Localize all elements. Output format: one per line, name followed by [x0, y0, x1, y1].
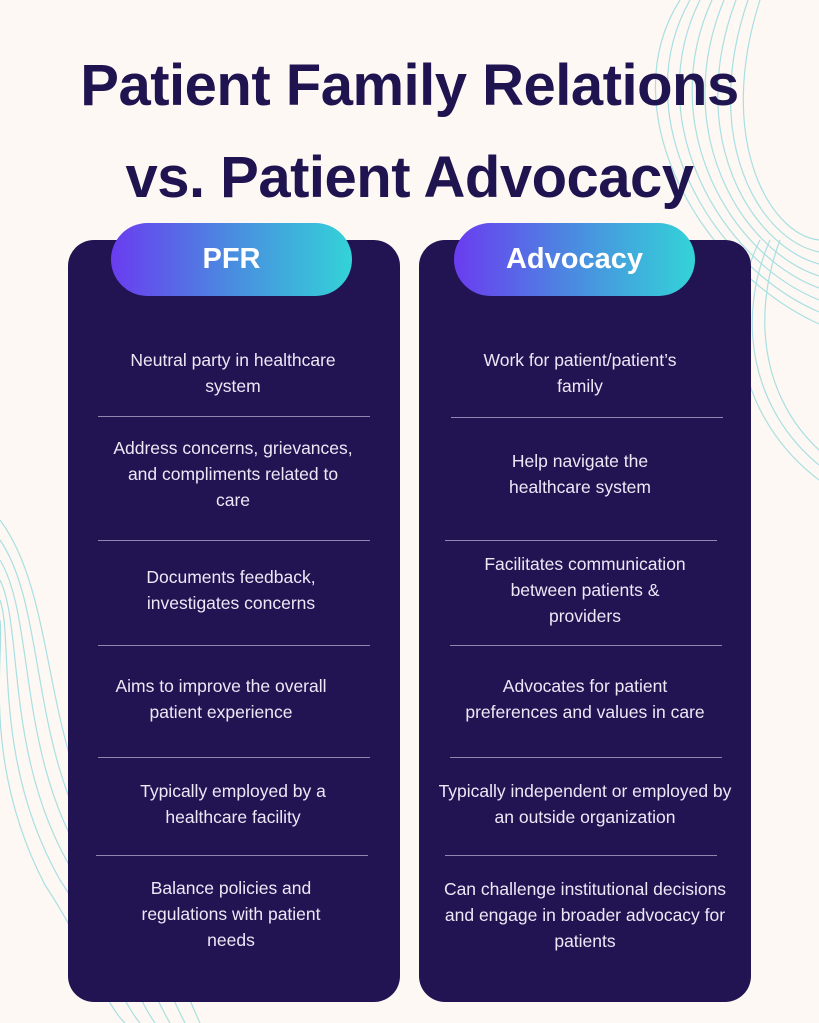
text: PFR 3: Documents feedback,: [146, 567, 316, 587]
text: Advocacy 2: healthcare system: [509, 477, 651, 497]
text: PFR 6: needs: [207, 930, 255, 950]
text: Advocacy 3: between patients &: [511, 580, 659, 600]
text: PFR 2: Address concerns, grievances,: [113, 438, 353, 458]
text: Advocacy 2: Help navigate the: [512, 451, 648, 471]
text: Advocacy 5: Typically independent or employed by: [439, 781, 731, 801]
text: PFR 5: healthcare facility: [165, 807, 301, 827]
title: Patient Family Relations: [80, 53, 739, 118]
text: PFR 4: [115, 676, 327, 722]
text: Advocacy 6: patients: [554, 931, 616, 951]
text: PFR 2: [113, 438, 353, 510]
text: Advocacy 1: [484, 350, 676, 396]
text: Advocacy 5: an outside organization: [495, 807, 675, 827]
text: Advocacy 2: [509, 451, 651, 497]
text: PFR 2: and compliments related to: [128, 464, 338, 484]
text: Advocacy 3: Facilitates communication: [484, 554, 686, 574]
text: Advocacy 6: [444, 879, 726, 951]
text: PFR 1: Neutral party in healthcare: [130, 350, 336, 370]
text: Advocacy 3: providers: [549, 606, 621, 626]
panel: Advocacy: [419, 240, 751, 1002]
text: PFR 4: patient experience: [149, 702, 293, 722]
heading: PFR: [111, 223, 352, 296]
text: Advocacy 6: Can challenge institutional decisions: [444, 879, 726, 899]
heading: Advocacy: [454, 223, 695, 296]
text: PFR 3: [146, 567, 316, 613]
text: Advocacy 4: Advocates for patient: [503, 676, 667, 696]
text: PFR 4: Aims to improve the overall: [115, 676, 327, 696]
text: PFR 6: Balance policies and: [151, 878, 311, 898]
subtitle: vs. Patient Advocacy: [125, 145, 694, 210]
text: PFR 3: investigates concerns: [147, 593, 315, 613]
text: Advocacy 3: [484, 554, 686, 626]
panel: PFR: [68, 240, 400, 1002]
text: PFR 6: [142, 878, 320, 950]
text: PFR 1: system: [205, 376, 261, 396]
text: PFR 5: [140, 781, 326, 827]
text: Advocacy 4: [465, 676, 705, 722]
text: Advocacy 6: and engage in broader advocacy for: [445, 905, 725, 925]
heading: Advocacy: Advocacy: [506, 243, 643, 275]
text: Advocacy 1: family: [557, 376, 603, 396]
text: Advocacy 1: Work for patient/patient’s: [484, 350, 676, 370]
text: Advocacy 5: [439, 781, 732, 827]
text: PFR 2: care: [216, 490, 250, 510]
text: PFR 5: Typically employed by a: [140, 781, 326, 801]
text: Advocacy 4: preferences and values in care: [465, 702, 705, 722]
heading: PFR: PFR: [202, 243, 260, 275]
text: PFR 1: [130, 350, 336, 396]
text: PFR 6: regulations with patient: [142, 904, 320, 924]
